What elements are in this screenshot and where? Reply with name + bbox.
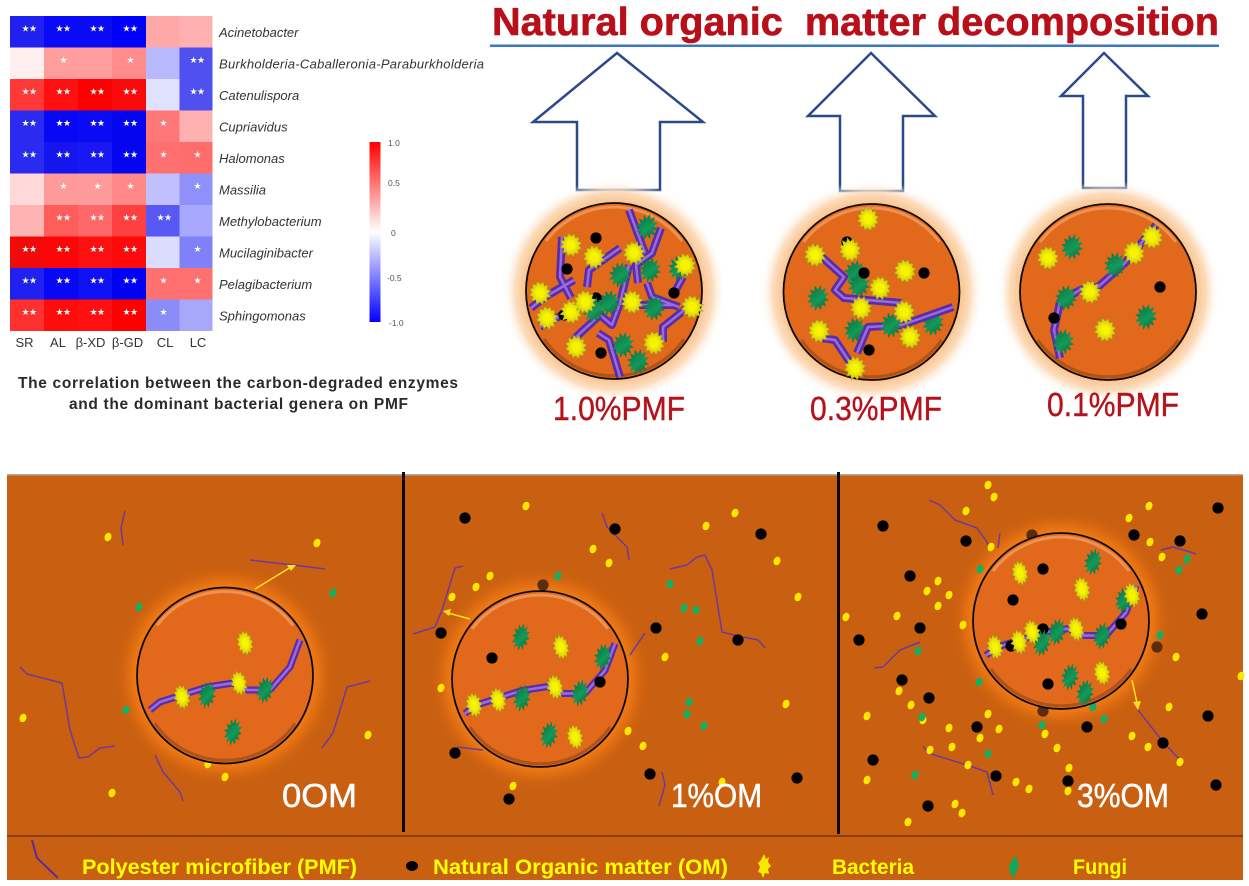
legend: bacteria <box>758 854 914 879</box>
enzyme axis labels: SR <box>15 335 34 350</box>
row: Mucilaginibacter: ★★★★★★★★★ <box>22 245 202 255</box>
legend: PMF <box>32 840 357 879</box>
genus labels <box>218 25 484 324</box>
row: Methylobacterium <box>10 205 212 236</box>
row: Sphingomonas <box>10 300 212 331</box>
panel: 3%OM <box>841 480 1246 827</box>
colour scale legend: -1.0 <box>389 318 404 328</box>
divider: right <box>837 472 840 834</box>
genus labels: Burkholderia-Caballeronia-Paraburkholderia <box>219 56 484 72</box>
row: Acinetobacter: ★★★★★★★★ <box>22 24 138 34</box>
heatmap caption <box>18 375 458 413</box>
row: Burkholderia: ★★★★ <box>60 56 205 66</box>
genus labels: Sphingomonas <box>219 308 306 324</box>
label: 1.0%PMF: 1.0%PMF <box>553 390 685 427</box>
enzyme axis labels: AL <box>50 335 66 350</box>
label: 0.3%PMF: 0.3%PMF <box>810 390 942 427</box>
row: Catenulispora <box>10 79 212 110</box>
panel: 0.3% PMF circle <box>760 180 984 404</box>
row: Burkholderia <box>10 48 212 79</box>
genus labels: Mucilaginibacter <box>219 246 314 260</box>
panel: 0OM <box>18 511 373 814</box>
colour scale legend: 0.5 <box>388 178 400 188</box>
enzyme axis labels: CL <box>157 335 173 350</box>
row: Cupriavidus <box>10 110 212 142</box>
row: Acinetobacter <box>10 16 212 48</box>
panel: 1%OM: 1%OM <box>671 777 762 814</box>
heatmap caption: and the dominant bacterial genera on PMF <box>69 396 408 413</box>
row: Halomonas: ★★★★★★★★★★ <box>22 150 202 160</box>
row: Pelagibacterium <box>10 268 212 300</box>
enzyme axis labels <box>15 335 206 350</box>
legend: fungi: Fungi <box>1073 856 1127 879</box>
legend: bacteria: Bacteria <box>832 856 914 879</box>
panel: 0.1% PMF circle <box>996 180 1220 404</box>
panel: 0OM: 0OM <box>282 777 357 814</box>
heatmap caption: The correlation between the carbon-degraded enzymes <box>18 375 458 392</box>
genus labels: Catenulispora <box>219 88 299 103</box>
enzyme axis labels: β-XD <box>76 335 105 350</box>
legend <box>32 840 1127 879</box>
row: Cupriavidus: ★★★★★★★★★ <box>22 119 168 129</box>
enzyme axis labels: β-GD <box>112 335 143 350</box>
legend: PMF: Polyester microfiber (PMF) <box>82 856 357 879</box>
colour scale legend: 1.0 <box>388 138 400 148</box>
row: Pelagibacterium: ★★★★★★★★★★ <box>22 276 202 286</box>
colour scale legend: -0.5 <box>387 273 402 283</box>
panel: 1.0% PMF circle <box>502 179 726 403</box>
divider: left <box>402 472 405 832</box>
row: Sphingomonas: ★★★★★★★★★ <box>22 308 168 318</box>
arrow: release <box>1132 680 1141 710</box>
row: Massilia <box>10 174 212 205</box>
arrow: release <box>255 565 296 589</box>
genus labels: Pelagibacterium <box>219 277 312 292</box>
genus labels: Cupriavidus <box>219 120 288 134</box>
label: 0.1%PMF: 0.1%PMF <box>1047 386 1179 423</box>
heatmap: enzyme and genera correlation <box>10 16 212 331</box>
arrow: 0.1% PMF <box>1061 53 1148 188</box>
panel: 1%OM <box>413 501 803 814</box>
arrow: release <box>443 609 470 619</box>
title underline <box>490 44 1219 47</box>
genus labels: Methylobacterium <box>219 214 322 229</box>
colour scale legend <box>370 138 404 328</box>
title: Natural organic matter decomposition <box>492 1 1219 44</box>
row: Mucilaginibacter <box>10 236 212 268</box>
row: Halomonas <box>10 142 212 174</box>
panel: 3%OM: 3%OM <box>1077 777 1169 814</box>
legend: OM: Natural Organic matter (OM) <box>433 856 728 879</box>
genus labels: Acinetobacter <box>218 25 299 40</box>
legend: fungi <box>1009 856 1127 879</box>
row: Methylobacterium: ★★★★★★★★ <box>56 214 172 224</box>
row: Massilia: ★★★★ <box>60 182 202 192</box>
genus labels: Massilia <box>219 182 266 198</box>
enzyme axis labels: LC <box>190 335 206 350</box>
row: Catenulispora: ★★★★★★★★★★ <box>22 88 205 98</box>
arrow: 0.3% PMF <box>808 53 935 191</box>
arrow: 1.0% PMF <box>533 53 703 190</box>
colour scale legend: 0 <box>391 228 396 238</box>
genus labels: Halomonas <box>219 151 285 166</box>
soil background panel <box>7 474 1243 880</box>
